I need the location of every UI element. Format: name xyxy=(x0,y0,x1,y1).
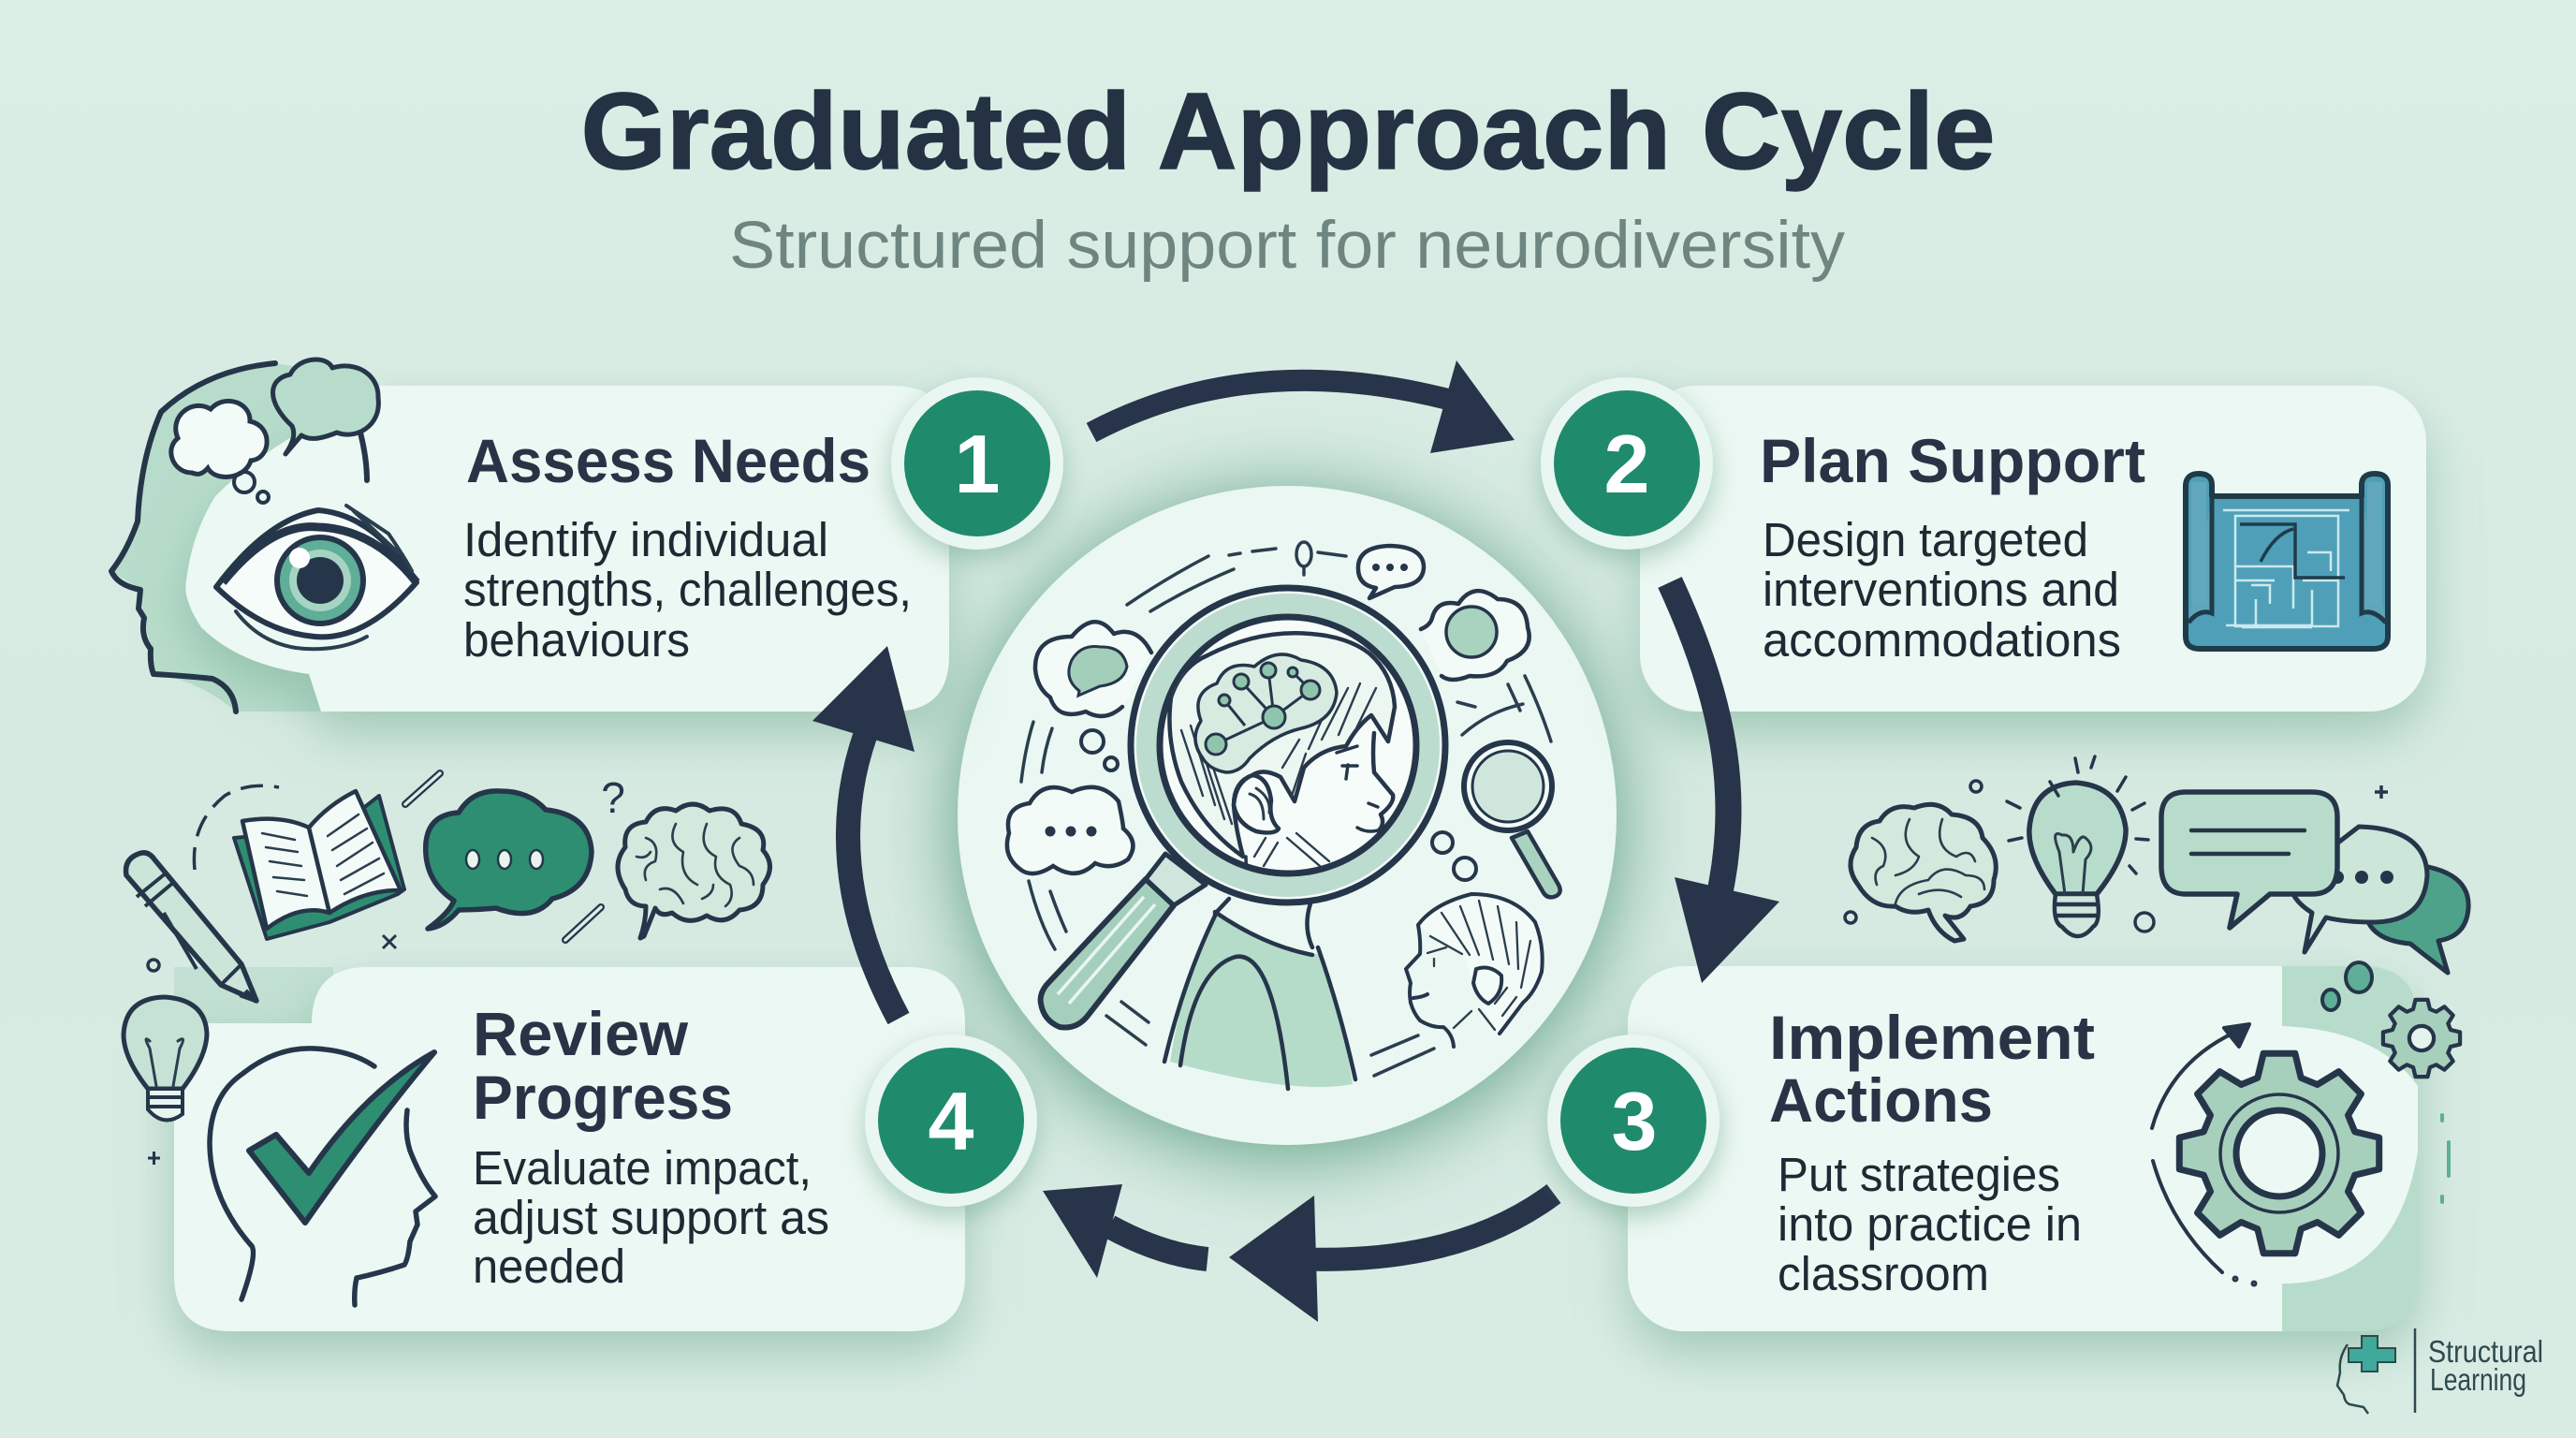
card background xyxy=(1628,966,2418,1331)
body text: Put strategies xyxy=(1778,1148,2060,1201)
icon: thought dots xyxy=(1081,730,1476,880)
logo: Structural Learning: Learning xyxy=(2430,1362,2526,1397)
icon: teal speech bubble back xyxy=(2368,863,2468,973)
logo: Structural Learning: Structural xyxy=(2428,1334,2543,1369)
body text: Evaluate impact, xyxy=(473,1141,812,1195)
icon: small gear xyxy=(2383,1000,2460,1077)
icon: mint speech bubble middle xyxy=(2290,827,2427,952)
heading: Plan Support xyxy=(1760,426,2145,495)
icon: question mark: ? xyxy=(601,773,625,822)
badge: 4 xyxy=(865,1034,1037,1207)
icon: speech bubble with lines xyxy=(2161,792,2337,928)
card background xyxy=(1640,386,2426,712)
arrow: step 1 to 2 xyxy=(1091,360,1515,453)
heading: Review xyxy=(473,999,689,1068)
icon group: top right ideas icons xyxy=(1845,756,2468,973)
icon: thought cloud with mint circle xyxy=(1421,591,1530,680)
body text: Design targeted xyxy=(1763,513,2088,566)
icon: rotating arrow xyxy=(2152,1024,2256,1284)
icon: large gear xyxy=(2179,1053,2379,1254)
icon: small circle xyxy=(148,960,159,971)
icon: small circles xyxy=(1845,781,2388,932)
body text: into practice in xyxy=(1778,1197,2082,1251)
body text xyxy=(463,513,912,667)
subtitle: Structured support for neurodiversity xyxy=(729,209,1846,283)
icon: small child profile xyxy=(1406,894,1543,1047)
icon: small pen marks xyxy=(405,773,601,940)
icon: eye xyxy=(216,506,417,649)
panel: step 2 xyxy=(1640,386,2426,712)
icon: dashed accent xyxy=(2442,1115,2449,1202)
icon: blueprint xyxy=(2186,474,2388,649)
card background xyxy=(185,386,949,712)
icon: brain xyxy=(1851,804,1996,941)
heading xyxy=(473,999,733,1132)
panel: step 3 xyxy=(1628,966,2418,1331)
arrow: step 3 to 4 main xyxy=(1229,1194,1554,1322)
heading xyxy=(1769,1003,2095,1135)
body text: interventions and xyxy=(1763,563,2119,616)
icon: small speech bubble xyxy=(1358,546,1424,598)
icon: small magnifying glass xyxy=(1464,742,1560,897)
badge: 2 xyxy=(1541,377,1713,550)
arrow: step 3 to 4 lead xyxy=(1043,1184,1208,1278)
mint corner backdrop xyxy=(174,967,333,1033)
heading: Progress xyxy=(473,1063,733,1132)
body text xyxy=(473,1141,829,1293)
mint corner backdrop xyxy=(2282,966,2418,1331)
icon: open book xyxy=(234,791,404,939)
logo: Structural Learning xyxy=(2337,1328,2543,1414)
body text: strengths, challenges, xyxy=(463,563,912,616)
panel: step 4 xyxy=(174,967,965,1331)
body text xyxy=(1763,513,2121,667)
body text: Identify individual xyxy=(463,513,828,566)
icon: thought cloud with mint blob xyxy=(1035,622,1151,716)
arrow: step 4 to 1 xyxy=(812,646,915,1019)
panel: center illustration xyxy=(958,486,1617,1145)
badge: 2: 2 xyxy=(1604,418,1649,510)
icon: magnifying glass handle xyxy=(1041,854,1206,1028)
badge: 4: 4 xyxy=(929,1075,974,1167)
head mint backdrop xyxy=(111,363,377,712)
badge: 3: 3 xyxy=(1612,1075,1657,1167)
body text: adjust support as xyxy=(473,1191,829,1244)
icon: brain xyxy=(618,804,769,938)
icon: body of child xyxy=(1164,899,1355,1089)
body text: behaviours xyxy=(463,613,690,667)
badge: 1: 1 xyxy=(955,418,1000,510)
heading: Assess Needs xyxy=(466,426,871,495)
icon: head outline xyxy=(111,363,367,712)
motion lines xyxy=(1021,542,1551,1076)
icon: plus xyxy=(148,1152,160,1165)
body text: accommodations xyxy=(1763,613,2121,667)
icon: light bulb left xyxy=(124,997,207,1120)
icon: check mark xyxy=(249,1052,434,1223)
badge: 3 xyxy=(1547,1034,1720,1207)
heading: Implement xyxy=(1769,1003,2095,1072)
badge: 1 xyxy=(891,377,1063,550)
body text: needed xyxy=(473,1240,625,1293)
icon group: top left learning icons xyxy=(126,773,770,1001)
heading: Actions xyxy=(1769,1065,1993,1135)
body text xyxy=(1778,1148,2082,1300)
icon: light bulb xyxy=(2007,756,2148,936)
icon: magnifying glass lens with child xyxy=(1131,588,1445,902)
card background xyxy=(174,967,965,1331)
icon: pencil xyxy=(126,853,256,1001)
icon: head outline xyxy=(210,1049,435,1305)
icon: thought cloud with dots xyxy=(1007,787,1133,873)
icon: cross mark xyxy=(383,935,396,948)
icon: teal speech bubble xyxy=(426,791,592,929)
arrow: step 2 to 3 xyxy=(1670,582,1779,983)
title: Graduated Approach Cycle xyxy=(580,70,1996,192)
icon: thought clouds xyxy=(171,360,378,503)
icon: teal dots xyxy=(2322,962,2372,1010)
icon: dashed arc xyxy=(194,785,279,870)
body text: classroom xyxy=(1778,1247,1989,1300)
panel: step 1 xyxy=(111,360,949,712)
